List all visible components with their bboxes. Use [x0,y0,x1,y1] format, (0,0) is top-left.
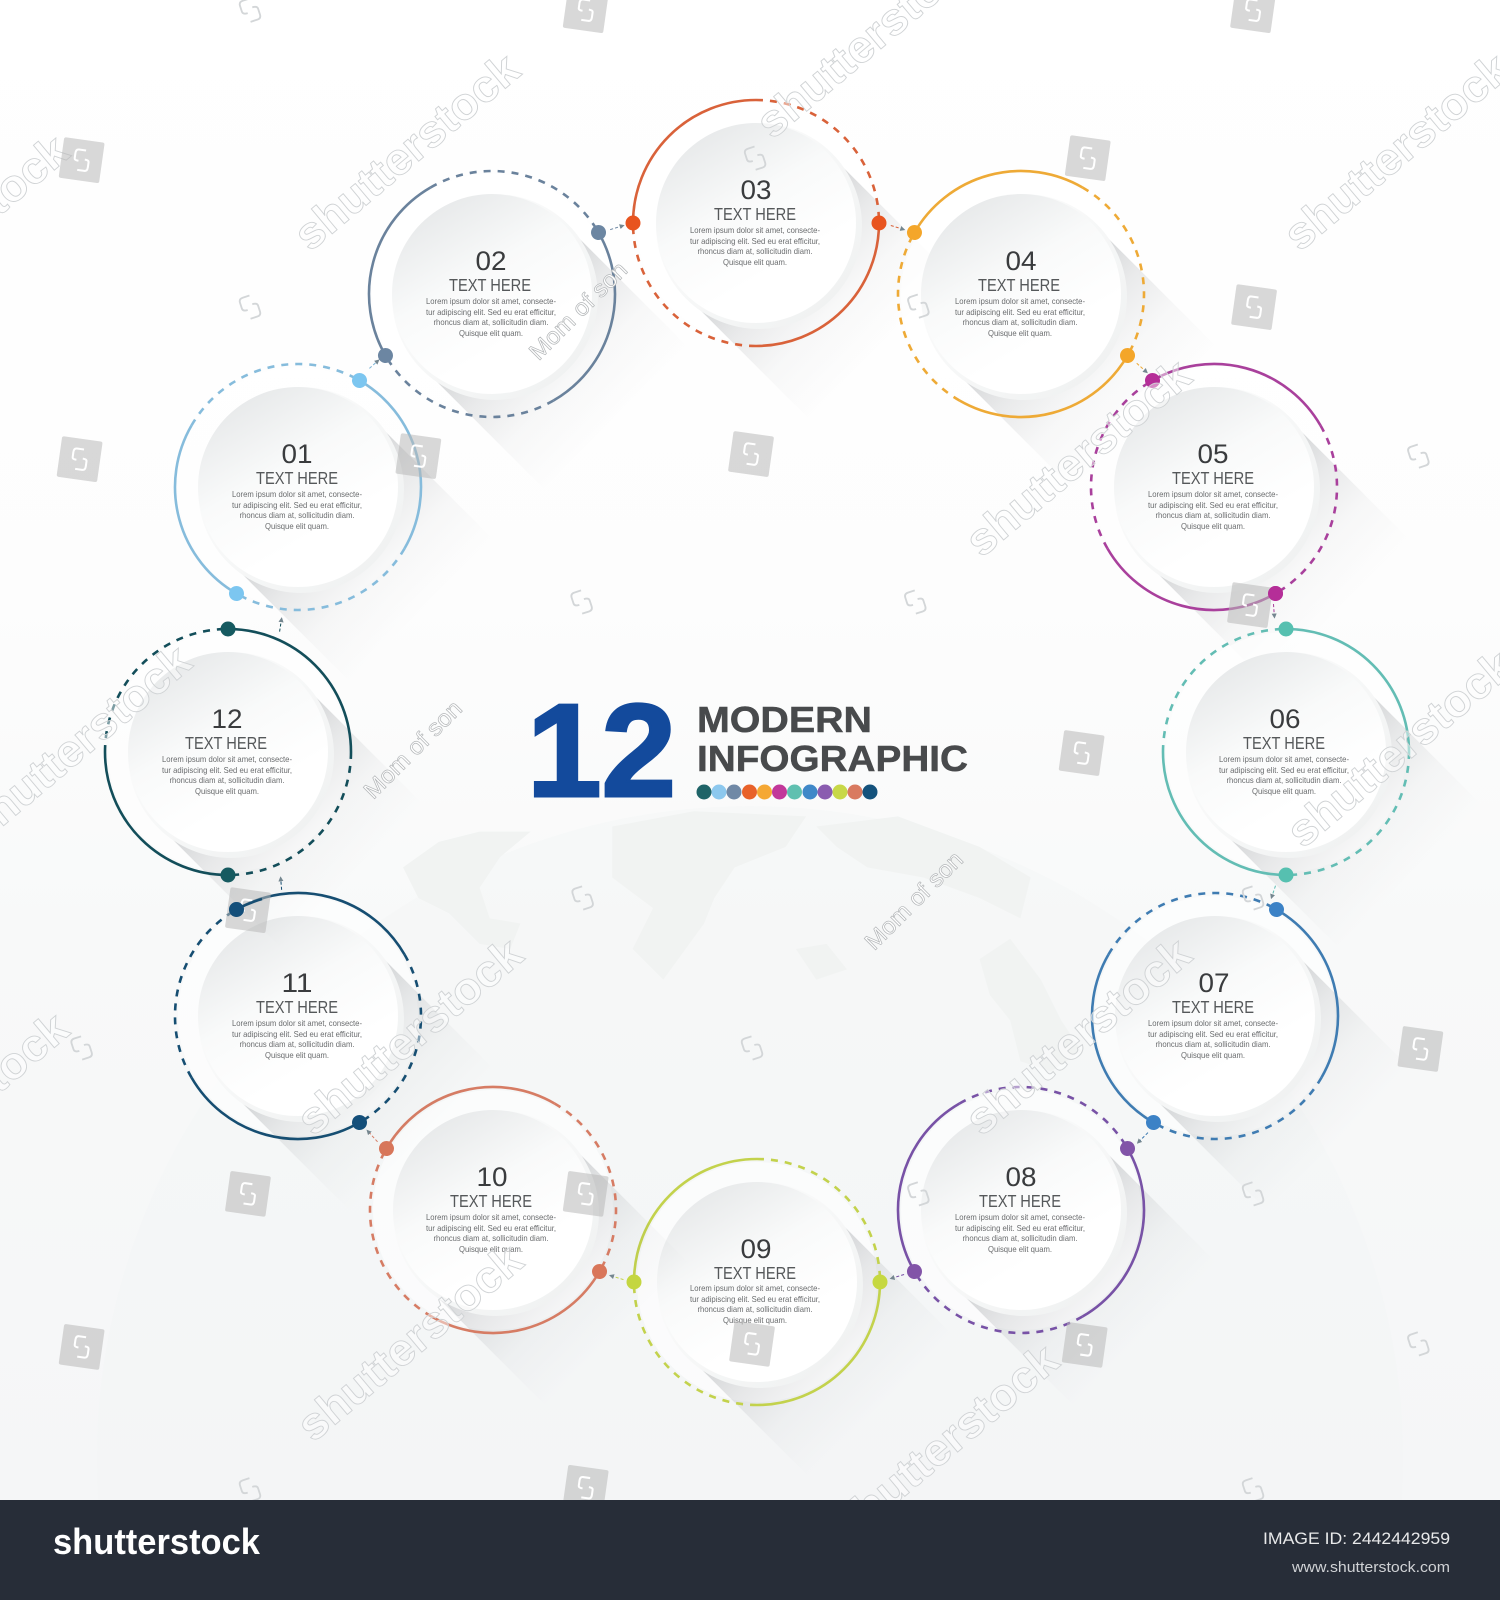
ring 05 [1042,312,1386,662]
number: 01 [282,439,312,469]
body text: tur adipiscing elit. Sed eu erat efficitur, [1148,501,1278,510]
heading: TEXT HERE [449,275,531,295]
step 10 [318,1038,689,1406]
body text: rhoncus diam at, sollicitudin diam. [434,1234,548,1243]
title: modern infographic [697,699,968,779]
body text: tur adipiscing elit. Sed eu erat efficitur, [955,1224,1085,1233]
ring 10 [318,1038,668,1382]
step 05 [1042,312,1410,683]
title: 12: 12 [527,677,676,824]
colour dots legend [696,784,878,800]
heading: TEXT HERE [714,204,796,224]
body text: tur adipiscing elit. Sed eu erat efficitur, [232,1030,362,1039]
disc [921,1110,1127,1316]
shadow [1146,419,1410,683]
body text: rhoncus diam at, sollicitudin diam. [962,1234,1078,1243]
body text: rhoncus diam at, sollicitudin diam. [1226,776,1342,785]
shadow [425,1142,689,1406]
number: 10 [476,1162,507,1192]
disc [198,916,404,1122]
body text: Quisque elit quam. [1181,1051,1245,1060]
disc [656,123,862,329]
ring 02 [317,122,667,466]
body text [426,297,556,338]
watermark layer: shutterstock [955,927,1201,1145]
step 03 [626,100,952,419]
watermark layer: shutterstock [822,1333,1068,1551]
disc [128,652,334,858]
title: modern infographic: MODERN [697,699,872,740]
number: 03 [741,175,771,205]
body text [955,297,1085,338]
number: 09 [740,1234,771,1264]
world map background [97,806,1403,1600]
body text: Quisque elit quam. [723,1316,787,1325]
body text: Lorem ipsum dolor sit amet, consecte- [690,226,820,235]
body text: rhoncus diam at, sollicitudin diam. [240,1040,354,1049]
heading: TEXT HERE [256,468,338,488]
body text [690,226,820,267]
step 07 [1043,841,1411,1212]
ring 07 [1043,841,1387,1191]
heading: TEXT HERE [714,1263,796,1283]
watermark layer: Mom of son [524,256,632,365]
body text: tur adipiscing elit. Sed eu erat efficitur, [232,501,362,510]
number: 07 [1198,968,1229,998]
body text [1148,490,1278,531]
heading: TEXT HERE [979,1191,1061,1211]
body text: Lorem ipsum dolor sit amet, consecte- [955,1213,1085,1222]
body text [1148,1019,1278,1060]
step 01 [126,312,494,683]
body text: Lorem ipsum dolor sit amet, consecte- [426,1213,556,1222]
number: 12 [212,704,242,734]
heading: TEXT HERE [185,733,267,753]
body text [232,1019,362,1060]
heading: TEXT HERE [450,1191,532,1211]
step 12 [105,622,424,948]
body text: tur adipiscing elit. Sed eu erat efficitur, [690,237,820,246]
body text: Quisque elit quam. [459,329,523,338]
title: modern infographic: INFOGRAPHIC [697,738,968,779]
body text: rhoncus diam at, sollicitudin diam. [698,247,812,256]
shadow [688,155,952,419]
body text: Lorem ipsum dolor sit amet, consecte- [955,297,1085,306]
watermark layer: shutterstock [955,349,1201,566]
body text [232,490,362,531]
body text: rhoncus diam at, sollicitudin diam. [698,1305,812,1314]
body text [955,1213,1085,1254]
body text: Lorem ipsum dolor sit amet, consecte- [162,755,292,764]
watermark layer: shutterstock [284,43,529,260]
body text: Lorem ipsum dolor sit amet, consecte- [1219,755,1349,764]
body text: rhoncus diam at, sollicitudin diam. [1156,1040,1270,1049]
body text: tur adipiscing elit. Sed eu erat efficitur, [690,1295,820,1304]
shadow [1218,684,1482,948]
ring 11 [126,841,470,1191]
body text: Lorem ipsum dolor sit amet, consecte- [1148,1019,1278,1028]
body text: Lorem ipsum dolor sit amet, consecte- [232,490,362,499]
shadow [160,684,424,948]
body text: tur adipiscing elit. Sed eu erat efficitur, [162,766,292,775]
watermark layer: Mom of son [358,695,467,804]
step 09 [626,1159,953,1478]
body text: tur adipiscing elit. Sed eu erat efficitur, [426,1224,556,1233]
heading: TEXT HERE [1243,733,1325,753]
ring 09 [626,1159,888,1405]
ring 08 [846,1038,1196,1382]
body text: rhoncus diam at, sollicitudin diam. [962,318,1078,327]
body text [162,755,292,796]
shadow [953,1142,1217,1406]
body text: Lorem ipsum dolor sit amet, consecte- [426,297,556,306]
watermark layer: Mom of son [859,846,968,955]
step 11 [126,841,494,1212]
body text: Quisque elit quam. [988,1245,1052,1254]
body text: Quisque elit quam. [459,1245,523,1254]
body text: Quisque elit quam. [988,329,1052,338]
shadow [230,948,494,1212]
heading: TEXT HERE [1172,997,1254,1017]
body text: Lorem ipsum dolor sit amet, consecte- [232,1019,362,1028]
disc [921,194,1127,400]
disc [657,1182,863,1388]
body text: rhoncus diam at, sollicitudin diam. [1156,511,1270,520]
body text: tur adipiscing elit. Sed eu erat efficitur, [955,308,1085,317]
step 04 [846,122,1217,490]
heading: TEXT HERE [256,997,338,1017]
connector arrows [280,226,1276,1280]
body text: tur adipiscing elit. Sed eu erat efficitur, [1219,766,1349,775]
body text [690,1284,820,1325]
disc [1186,652,1392,858]
ring 06 [1163,622,1409,882]
disc [393,1110,599,1316]
body text: Quisque elit quam. [265,1051,329,1060]
body text: Quisque elit quam. [195,787,259,796]
body text: Lorem ipsum dolor sit amet, consecte- [1148,490,1278,499]
ring 12 [105,622,351,882]
body text [1219,755,1349,796]
watermark layer: shutterstock [287,1233,532,1451]
number: 11 [282,968,313,998]
shadow [689,1214,953,1478]
disc [392,194,598,400]
shadow [424,226,688,490]
number: 06 [1270,704,1300,734]
body text: Quisque elit quam. [1181,522,1245,531]
ring 03 [626,100,886,346]
footer logo: shutterstock [53,1521,261,1562]
shadow [230,419,494,683]
body text: tur adipiscing elit. Sed eu erat efficitur, [426,308,556,317]
body text: rhoncus diam at, sollicitudin diam. [240,511,354,520]
number: 05 [1198,439,1228,469]
disc [1114,387,1320,593]
step 02 [317,122,688,490]
shadow [1147,948,1411,1212]
step 08 [846,1038,1217,1406]
body text: rhoncus diam at, sollicitudin diam. [434,318,548,327]
ring 11 and 05 dots above watermark squares [229,586,1283,917]
step 06 [1163,622,1482,948]
footer image id: IMAGE ID: 2442442959 [1263,1529,1450,1548]
body text: Quisque elit quam. [1252,787,1316,796]
body text: Lorem ipsum dolor sit amet, consecte- [690,1284,820,1293]
disc [198,387,404,593]
ring 04 [846,122,1196,466]
heading: TEXT HERE [978,275,1060,295]
body text: tur adipiscing elit. Sed eu erat efficitur, [1148,1030,1278,1039]
body text: Quisque elit quam. [723,258,787,267]
footer band [0,1500,1500,1599]
heading: TEXT HERE [1172,468,1254,488]
number: 04 [1006,246,1036,276]
shadow [953,226,1217,490]
disc [1115,916,1321,1122]
body text [426,1213,556,1254]
ring 01 [126,312,470,662]
number: 02 [476,246,506,276]
number: 08 [1006,1162,1036,1192]
footer url: www.shutterstock.com [1291,1559,1450,1576]
watermark layer: shutterstock [287,927,532,1145]
body text: Quisque elit quam. [265,522,329,531]
body text: rhoncus diam at, sollicitudin diam. [170,776,284,785]
